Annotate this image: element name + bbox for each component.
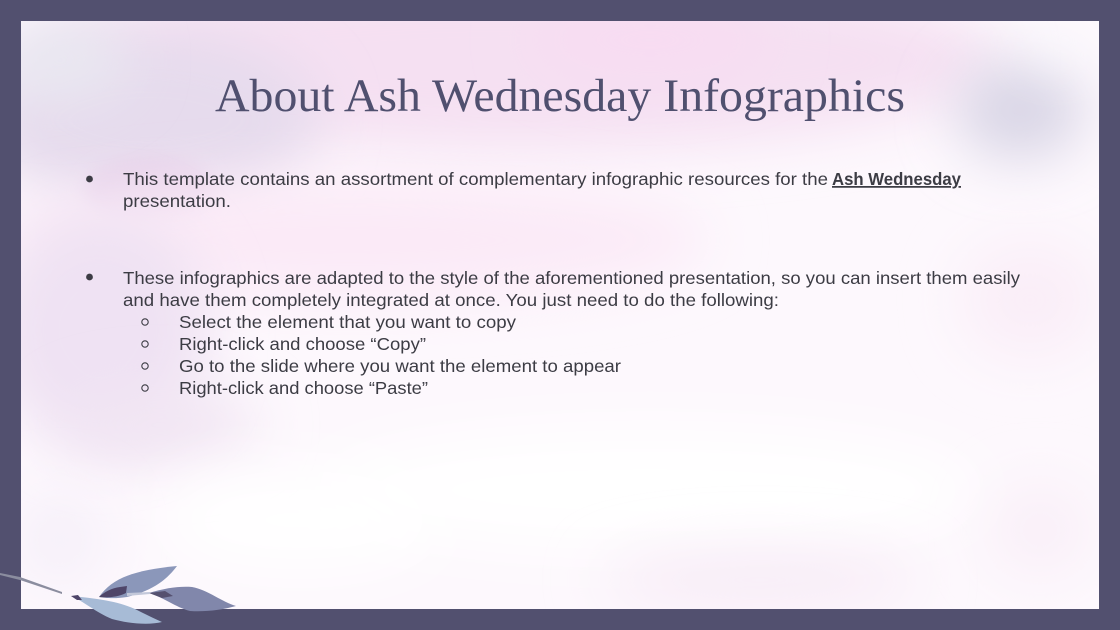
- sub-bullets: [142, 312, 621, 398]
- sub-bullets: Go to the slide where you want the element to appear: [179, 356, 621, 376]
- bullet 1: presentation.: [123, 191, 231, 211]
- bullet 1: This template contains an assortment of complementary infographic resources for the: [123, 169, 828, 189]
- bullet 2: [86, 268, 1020, 310]
- sub-bullets: Right-click and choose “Copy”: [179, 334, 426, 354]
- bullet 1: [86, 169, 961, 211]
- icon: leaf branch: [0, 566, 236, 624]
- bullet 2: These infographics are adapted to the style of the aforementioned presentation, so you can insert them easily: [123, 268, 1020, 288]
- bullet 2: and have them completely integrated at once. You just need to do the following:: [123, 290, 779, 310]
- sub-bullets: Right-click and choose “Paste”: [179, 378, 428, 398]
- bullet list: [86, 169, 1020, 398]
- title: About Ash Wednesday Infographics: [215, 70, 905, 122]
- bullet 1: Ash Wednesday: [832, 169, 961, 189]
- sub-bullets: Select the element that you want to copy: [179, 312, 516, 332]
